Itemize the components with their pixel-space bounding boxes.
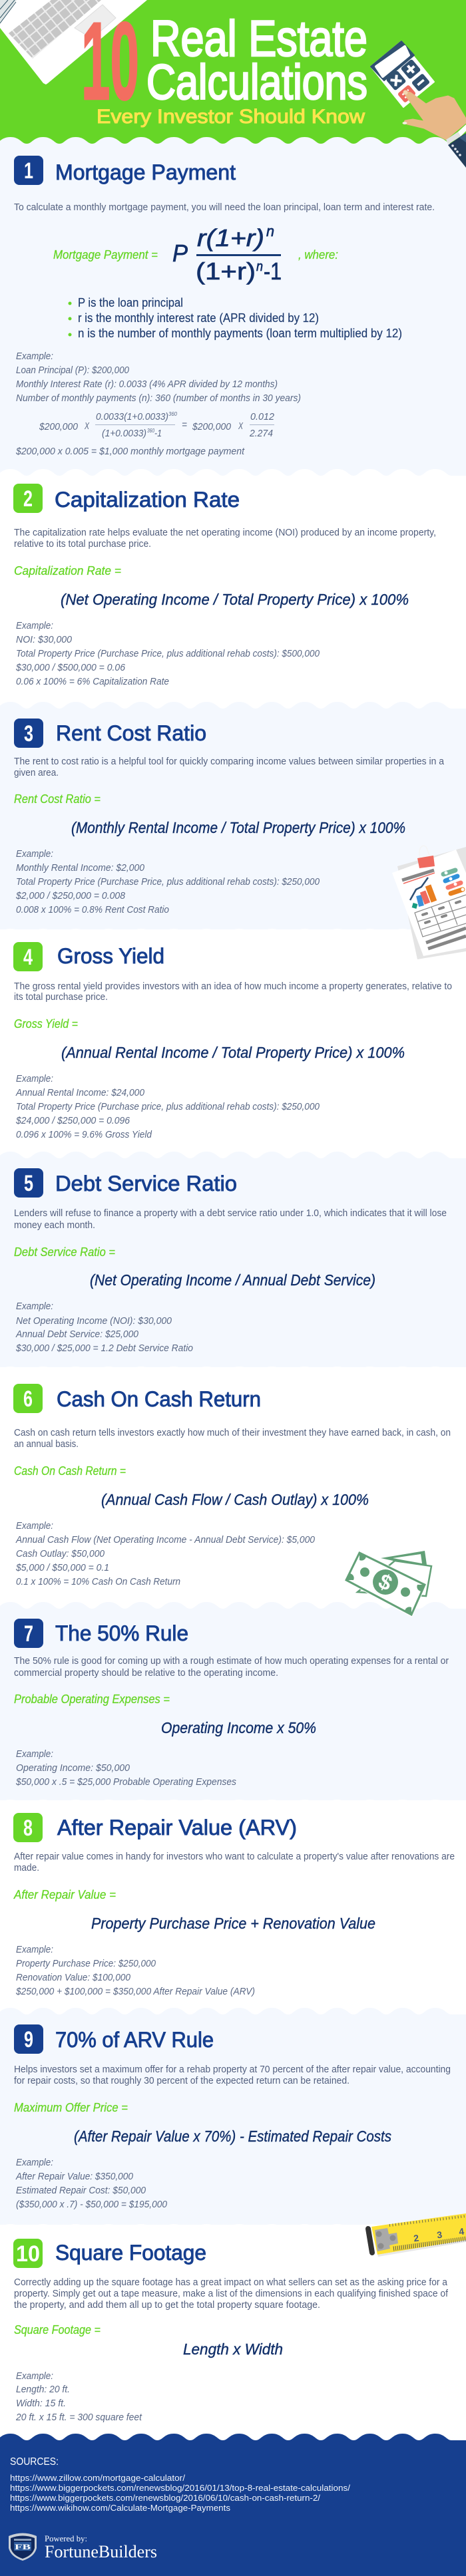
formula: (Net Operating Income / Total Property Price) x 100% [61, 591, 409, 608]
example: = [182, 420, 187, 430]
badge 7 [14, 1619, 43, 1648]
title line 1: Real Estate [150, 11, 367, 67]
intro text [14, 527, 436, 550]
intro text: its total purchase price. [14, 991, 108, 1003]
example: Property Purchase Price: $250,000 [16, 1959, 156, 1969]
example: 20 ft. x 15 ft. = 300 square feet [15, 2412, 142, 2423]
intro text: money each month. [14, 1219, 95, 1231]
icon: FortuneBuilders shield [9, 2533, 37, 2561]
badge 9: 9 [24, 2027, 33, 2052]
example: $30,000 / $25,000 = 1.2 Debt Service Ratio [15, 1343, 193, 1354]
example: $250,000 + $100,000 = $350,000 After Repair Value (ARV) [15, 1987, 255, 1997]
icon: money bills [344, 1551, 431, 1617]
heading: After Repair Value (ARV) [57, 1816, 297, 1840]
example: Estimated Repair Cost: $50,000 [16, 2185, 146, 2196]
icon: calculator [371, 41, 434, 107]
badge 8: 8 [23, 1816, 33, 1841]
icon: FortuneBuilders shield: FB [15, 2542, 31, 2551]
badge 1: 1 [24, 158, 33, 184]
intro text [14, 756, 445, 778]
example: X [238, 421, 244, 432]
panel: footer [0, 2434, 466, 2576]
mortgage formula: -1 [264, 257, 282, 285]
intro text [14, 2064, 451, 2086]
icon: money bills: $ [375, 1569, 396, 1595]
source links: https://www.wikihow.com/Calculate-Mortgage-Payments [10, 2503, 231, 2513]
example: 2.274 [249, 428, 273, 439]
intro text: commercial property should be relative to the operating income. [14, 1667, 278, 1679]
example: 0.096 x 100% = 9.6% Gross Yield [16, 1130, 152, 1140]
badge 5: 5 [24, 1171, 33, 1196]
variable list [68, 296, 402, 340]
intro text [14, 1427, 451, 1450]
intro text: To calculate a monthly mortgage payment, you will need the loan principal, loan term and interest rate. [14, 202, 435, 213]
formula label: Mortgage Payment = [53, 248, 158, 261]
example: $24,000 / $250,000 = 0.096 [15, 1116, 130, 1126]
example: NOI: $30,000 [16, 635, 72, 645]
example: ($350,000 x .7) - $50,000 = $195,000 [16, 2199, 167, 2210]
icon: pointing hand and sleeve [402, 90, 466, 168]
example: Cash Outlay: $50,000 [16, 1549, 105, 1559]
heading: Capitalization Rate [55, 488, 240, 512]
badge 6: 6 [23, 1386, 33, 1412]
source links: https://www.zillow.com/mortgage-calculator/ [10, 2473, 185, 2483]
example: Example: [16, 2371, 53, 2382]
example: Renovation Value: $100,000 [16, 1973, 130, 1983]
example [15, 1945, 255, 1997]
example [15, 1749, 236, 1788]
example: Example: [16, 351, 53, 362]
icon: tape measure [368, 2213, 466, 2257]
example [15, 2371, 142, 2423]
panel: 8 After Repair Value [0, 1800, 466, 2009]
badge 4 [13, 942, 43, 971]
mortgage formula: P [172, 240, 188, 267]
example: Annual Debt Service: $25,000 [15, 1329, 138, 1340]
mortgage formula [172, 223, 282, 285]
badge 10: 10 [16, 2241, 40, 2267]
badge 4: 4 [23, 945, 33, 970]
panel: 3 Rent Cost Ratio [0, 702, 466, 929]
badge 8 [13, 1813, 43, 1842]
formula: (Net Operating Income / Annual Debt Service) [90, 1271, 375, 1289]
panel: 6 Cash On Cash Return [0, 1367, 466, 1603]
example: Total Property Price (Purchase Price, plus additional rehab costs): $250,000 [16, 877, 320, 887]
example: Monthly Interest Rate (r): 0.0033 (4% APR divided by 12 months) [16, 379, 278, 390]
source links: https://www.biggerpockets.com/renewsblog/2016/01/13/top-8-real-estate-calculations/ [10, 2483, 350, 2493]
where label: , where: [298, 248, 338, 261]
example: $30,000 / $500,000 = 0.06 [15, 663, 126, 673]
formula label: Capitalization Rate = [14, 564, 121, 577]
title line 2: Calculations [146, 55, 367, 110]
panel: 4 Gross Yield [0, 929, 466, 1152]
intro text: relative to its total purchase price. [14, 538, 151, 550]
example: Net Operating Income (NOI): $30,000 [16, 1316, 172, 1327]
example: Operating Income: $50,000 [16, 1763, 130, 1774]
panel: 9 70% of ARV Rule [0, 2008, 466, 2225]
badge 9 [14, 2024, 43, 2054]
formula: (Annual Rental Income / Total Property Price) x 100% [61, 1044, 405, 1061]
example: $2,000 / $250,000 = 0.008 [15, 891, 125, 901]
example [15, 1301, 193, 1354]
example: Width: 15 ft. [16, 2398, 66, 2409]
formula label: Probable Operating Expenses = [14, 1692, 170, 1706]
example: $50,000 x .5 = $25,000 Probable Operating Expenses [15, 1777, 236, 1788]
formula label: Square Footage = [14, 2323, 101, 2336]
mortgage formula: n [266, 223, 274, 240]
example [15, 351, 301, 457]
example [15, 1074, 320, 1140]
example: Example: [16, 1749, 53, 1760]
intro text: made. [14, 1862, 39, 1873]
icon: tape measure: 2 [413, 2232, 419, 2243]
panel: 7 The 50% Rule [0, 1602, 466, 1800]
example: 360 [168, 411, 178, 417]
formula label: After Repair Value = [13, 1888, 116, 1901]
example: Example: [16, 1301, 53, 1312]
panel: 1 Mortgage Payment [0, 137, 466, 476]
badge 3: 3 [24, 721, 33, 746]
example: $200,000 [192, 422, 231, 432]
panel: 10 Square Footage [0, 2224, 466, 2434]
example [15, 621, 320, 687]
formula label: Gross Yield = [14, 1017, 78, 1031]
example: 0.06 x 100% = 6% Capitalization Rate [16, 677, 169, 687]
badge 2 [13, 484, 43, 513]
intro text: an annual basis. [14, 1438, 79, 1450]
heading: Rent Cost Ratio [56, 721, 206, 745]
example: After Repair Value: $350,000 [15, 2172, 133, 2182]
heading: Mortgage Payment [55, 160, 236, 184]
icon: tape measure: 4 [458, 2225, 465, 2237]
formula label: Maximum Offer Price = [14, 2101, 128, 2114]
badge 7: 7 [24, 1621, 33, 1647]
example: 0.1 x 100% = 10% Cash On Cash Return [16, 1577, 180, 1587]
intro text: The rent to cost ratio is a helpful tool for quickly comparing income values between similar properties in a [14, 756, 445, 767]
intro text: the property, and add them all up to get the total property square footage. [14, 2299, 320, 2311]
mortgage formula: n [256, 259, 263, 274]
example: Example: [16, 849, 53, 860]
source links: https://www.biggerpockets.com/renewsblog/2016/06/10/cash-on-cash-return-2/ [10, 2493, 320, 2503]
powered by label: Powered by: [45, 2533, 87, 2543]
sources heading: SOURCES: [10, 2456, 59, 2468]
example: $5,000 / $50,000 = 0.1 [15, 1563, 109, 1573]
icon: tape measure: 3 [436, 2229, 443, 2240]
formula label: Debt Service Ratio = [14, 1245, 115, 1259]
variable list: P is the loan principal [78, 296, 183, 309]
FortuneBuilders logo text: FortuneBuilders [45, 2542, 157, 2561]
badge 1 [14, 156, 43, 185]
example: $200,000 [39, 422, 78, 432]
formula: Property Purchase Price + Renovation Value [91, 1915, 375, 1932]
formula: Operating Income x 50% [161, 1719, 316, 1736]
badge 2: 2 [23, 486, 33, 512]
example: 0.012 [250, 412, 274, 422]
example: Total Property Price (Purchase price, plus additional rehab costs): $250,000 [16, 1102, 320, 1112]
example: Number of monthly payments (n): 360 (number of months in 30 years) [16, 393, 301, 404]
heading: Square Footage [55, 2241, 206, 2265]
example: Example: [16, 2158, 53, 2168]
badge 3 [14, 719, 43, 748]
example: X [84, 421, 90, 432]
panel: 5 Debt Service Ratio [0, 1152, 466, 1367]
example: Monthly Rental Income: $2,000 [16, 863, 144, 874]
example: -1 [154, 428, 162, 439]
source links [10, 2473, 350, 2513]
example: Annual Cash Flow (Net Operating Income - Annual Debt Service): $5,000 [15, 1535, 315, 1545]
variable list: r is the monthly interest rate (APR divided by 12) [78, 311, 319, 325]
subtitle: Every Investor Should Know [97, 106, 365, 128]
example [15, 1521, 315, 1587]
formula label: Cash On Cash Return = [14, 1464, 126, 1478]
example: Annual Rental Income: $24,000 [15, 1088, 144, 1098]
mortgage formula: r(1+r) [197, 224, 264, 251]
badge 6 [13, 1384, 43, 1413]
example: Example: [16, 1521, 53, 1531]
example: Loan Principal (P): $200,000 [16, 365, 129, 376]
intro text: given area. [14, 767, 59, 778]
example: Length: 20 ft. [16, 2384, 70, 2395]
illustration: laptop [0, 0, 147, 84]
example: 360 [147, 428, 154, 434]
panel: header: 10 [81, 0, 139, 123]
heading: 70% of ARV Rule [55, 2028, 214, 2052]
intro text: for repair costs, so that roughly 30 percent of the expected return can be retained. [14, 2075, 350, 2086]
heading: The 50% Rule [55, 1621, 188, 1645]
example: 0.0033(1+0.0033) [96, 412, 168, 422]
example: Example: [16, 621, 53, 631]
icon: clipboard report [392, 846, 466, 959]
heading: Cash On Cash Return [57, 1387, 261, 1411]
heading: Debt Service Ratio [55, 1172, 237, 1196]
panel: header [0, 0, 466, 144]
intro text [14, 1851, 455, 1873]
mortgage formula: (1+r) [196, 257, 256, 285]
example [15, 2158, 167, 2210]
formula: (Monthly Rental Income / Total Property Price) x 100% [71, 819, 405, 836]
intro text [14, 1208, 447, 1231]
example: Example: [16, 1074, 53, 1084]
intro text [14, 981, 452, 1003]
panel: 2 Capitalization Rate [0, 469, 466, 703]
example: $200,000 x 0.005 = $1,000 monthly mortgage payment [15, 446, 245, 457]
intro text: The capitalization rate helps evaluate the net operating income (NOI) produced by an income property, [14, 527, 436, 538]
example [15, 849, 320, 915]
intro text [14, 1655, 449, 1679]
formula: Length x Width [183, 2340, 283, 2358]
variable list: n is the number of monthly payments (loan term multiplied by 12) [78, 327, 402, 340]
intro text [14, 2277, 449, 2311]
example: 0.008 x 100% = 0.8% Rent Cost Ratio [16, 905, 169, 915]
formula label: Rent Cost Ratio = [14, 792, 101, 806]
example: (1+0.0033) [102, 428, 146, 439]
example: Example: [16, 1945, 53, 1955]
heading: Gross Yield [57, 944, 164, 968]
formula: (Annual Cash Flow / Cash Outlay) x 100% [101, 1491, 369, 1508]
formula: (After Repair Value x 70%) - Estimated Repair Costs [74, 2128, 391, 2145]
badge 5 [14, 1168, 43, 1198]
example: Total Property Price (Purchase Price, plus additional rehab costs): $500,000 [16, 649, 320, 659]
